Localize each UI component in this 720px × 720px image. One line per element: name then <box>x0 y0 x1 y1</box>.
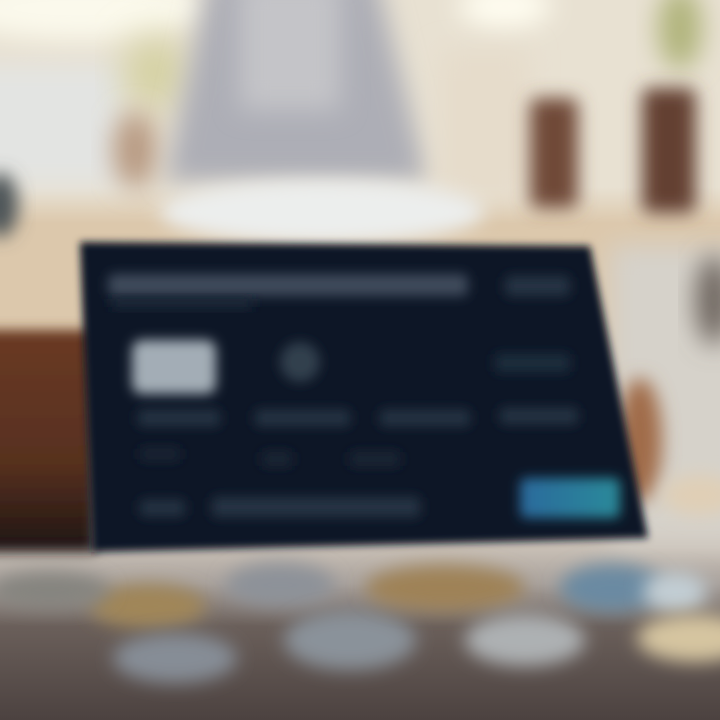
card title bar <box>108 274 468 296</box>
card name row <box>140 497 420 517</box>
white wall left <box>0 65 125 185</box>
card body <box>80 242 648 552</box>
pebble light front <box>465 614 585 666</box>
pebble white right <box>643 572 707 612</box>
pebble blue <box>560 564 664 612</box>
brown block left <box>0 330 95 552</box>
pebble tan left <box>90 584 206 628</box>
card number row <box>138 408 578 426</box>
pebble grey center back <box>225 563 335 607</box>
pebble cream right <box>637 614 720 662</box>
grey figure <box>165 0 428 182</box>
card top right marks <box>505 276 570 296</box>
brown jar one <box>530 98 578 208</box>
foreground stones <box>0 563 720 683</box>
pebble grey center front <box>284 610 416 670</box>
dark object far left <box>0 173 18 237</box>
brown object behind card right <box>618 378 662 502</box>
brown jar two <box>642 88 696 213</box>
figure highlight <box>240 0 340 110</box>
tan object right <box>662 475 720 515</box>
green foliage right <box>658 0 702 70</box>
brown shadow near figure <box>113 112 157 188</box>
card icon <box>280 342 320 382</box>
card blue button <box>520 478 620 518</box>
card top right value <box>495 354 570 372</box>
bright window glow top left <box>0 0 210 40</box>
light wall right of card <box>610 245 720 545</box>
dark object right <box>696 255 720 345</box>
white plate <box>160 180 484 244</box>
chip <box>132 340 216 394</box>
card small text row <box>140 448 400 466</box>
card subtitle <box>112 298 252 308</box>
top bright glow <box>459 0 551 28</box>
wall right <box>440 50 530 200</box>
pebble grey bottom left <box>113 633 237 683</box>
pebble grey far left <box>0 572 110 608</box>
green foliage left <box>125 36 185 108</box>
dark card <box>80 242 648 552</box>
pebble tan center <box>365 565 525 611</box>
